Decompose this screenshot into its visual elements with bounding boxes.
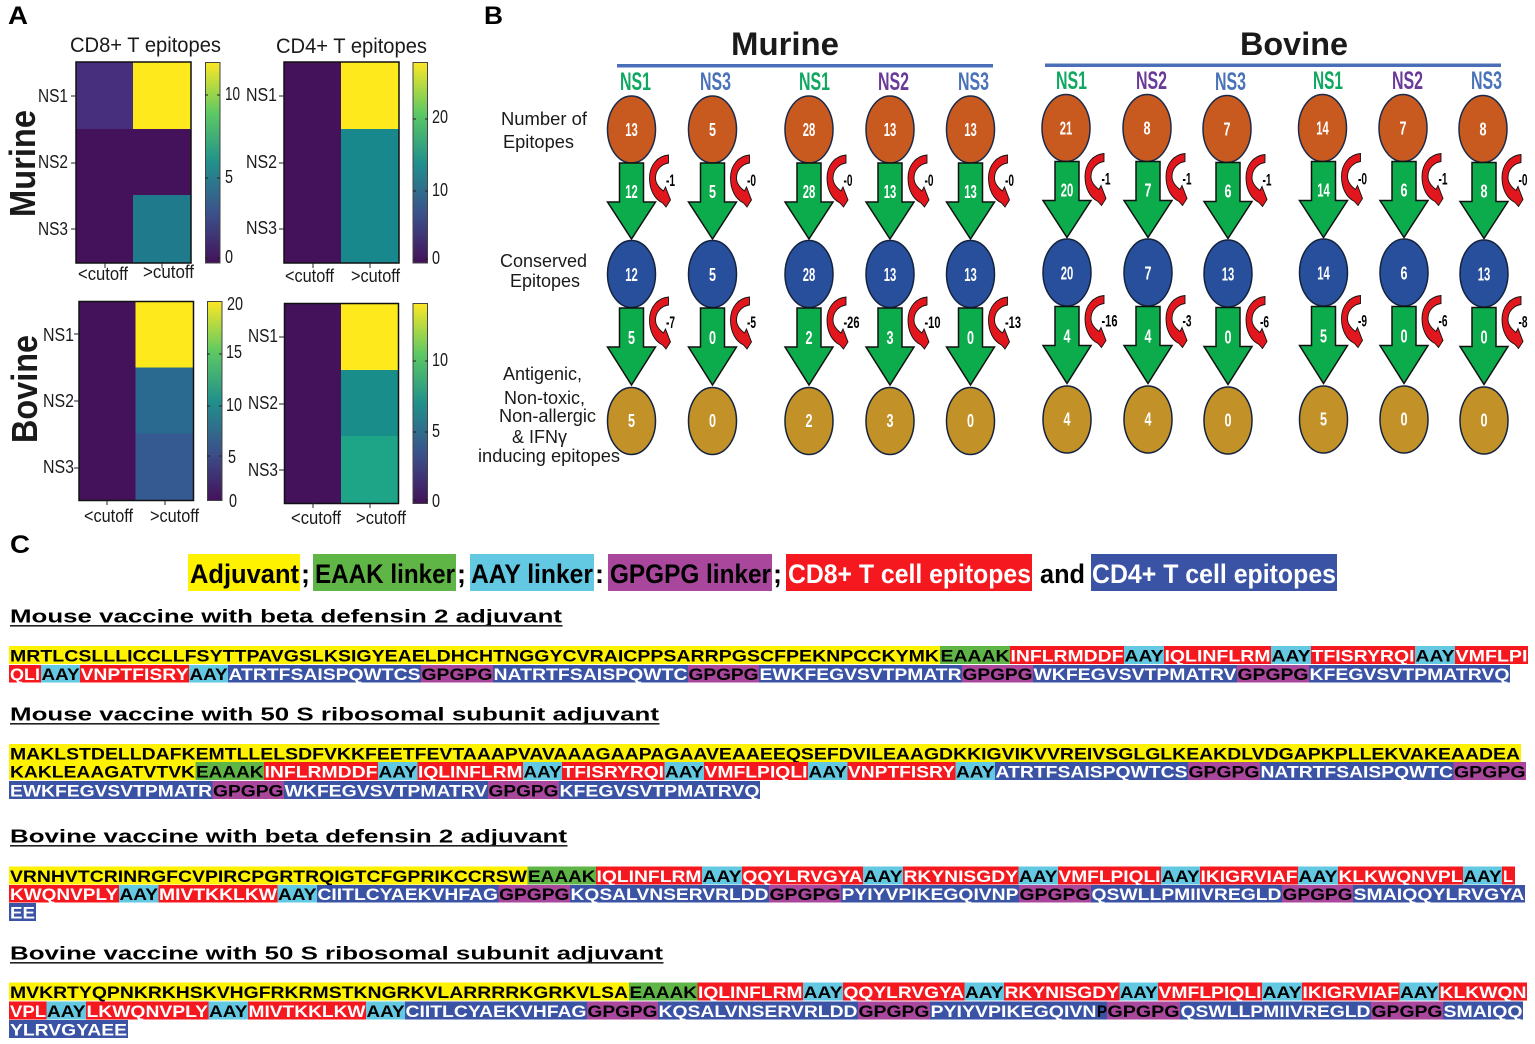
flow column: Bovine NS1 21 to 20 to 4 — [1042, 94, 1118, 453]
flow column: Murine NS3 13 to 13 to 0: -0 — [1005, 172, 1014, 190]
row label: Antigenic, non-toxic, non-allergic and IFN-gamma inducing epitopes: & IFNγ — [512, 427, 567, 447]
sequence: mouse beta defensin 2 vaccine: WKFEGVSVTPMATRV — [1034, 665, 1237, 684]
flow column: Bovine NS1 14 to 14 to 5: 14 — [1317, 264, 1330, 284]
heatmap: Bovine CD4: NS3 — [248, 460, 278, 480]
column header: Bovine NS1 second: NS1 — [1313, 67, 1343, 95]
flow column: Murine NS3 13 to 13 to 0: 0 — [967, 411, 974, 431]
heatmap: Bovine CD8: <cutoff — [84, 506, 134, 526]
sequence: bovine 50 S ribosomal vaccine: VPL — [10, 1002, 46, 1021]
panel C: colour legend: Adjuvant — [190, 559, 299, 589]
flow column: Bovine NS3 7 to 6 to 0: 0 — [1224, 328, 1232, 348]
flow column: Murine NS2 13 to 13 to 3: -0 — [924, 172, 934, 190]
sequence: bovine beta defensin 2 vaccine: AAY — [864, 867, 903, 886]
row label: Antigenic, non-toxic, non-allergic and IFN-gamma inducing epitopes: Non-allergic — [499, 406, 596, 426]
flow column: Bovine NS2 7 to 6 to 0: 6 — [1400, 264, 1408, 284]
flow column: Murine NS2 13 to 13 to 3: 13 — [884, 265, 896, 285]
sequence: mouse beta defensin 2 vaccine: GPGPG — [422, 665, 492, 684]
flow column: Murine NS1 13 to 12 to 5: 5 — [628, 411, 635, 431]
heatmap: Murine CD4: NS1 — [246, 85, 277, 105]
heatmap: Bovine CD8 — [43, 302, 200, 526]
flow column: Murine NS1 13 to 12 to 5: 12 — [625, 265, 638, 285]
heatmap: Murine CD8: NS1 — [38, 86, 68, 106]
heatmap: Bovine CD4: NS1 — [248, 326, 278, 346]
panel C: colour legend: ; — [301, 559, 310, 589]
Murine group rule — [617, 64, 993, 68]
flow column: Murine NS3 5 to 5 to 0: -5 — [747, 314, 756, 332]
sequence: mouse beta defensin 2 vaccine: GPGPG — [688, 665, 758, 684]
sequence: mouse 50 S ribosomal vaccine: GPGPG — [213, 782, 284, 800]
sequence: mouse beta defensin 2 vaccine: AAY — [1272, 646, 1311, 666]
sequence: mouse beta defensin 2 vaccine: AAY — [42, 665, 80, 684]
flow column: Murine NS1 13 to 12 to 5: -7 — [666, 314, 675, 332]
sequence: bovine beta defensin 2 vaccine: CIITLCYAEKVHFAG — [318, 885, 498, 904]
column header: Murine NS1 second: NS1 — [799, 68, 830, 96]
flow column: Bovine NS2 8 to 7 to 4: 4 — [1144, 326, 1152, 346]
sequence: bovine 50 S ribosomal vaccine: IKIGRVIAF — [1302, 983, 1399, 1002]
sequence: mouse beta defensin 2 vaccine: MRTLCSLLLICCLLFSYTTPAVGSLKSIGYEAELDHCHTNGGYCVRAICPPSARRPGSCFPEKNPCCKYMK — [10, 646, 940, 666]
column header: Murine NS3: NS3 — [700, 68, 731, 96]
flow column: Murine NS1 28 to 28 to 2: 2 — [806, 411, 812, 431]
colorbar: Murine CD8: 0 — [225, 247, 233, 267]
flow column: Bovine NS1 21 to 20 to 4: 20 — [1061, 264, 1073, 284]
flow column: Bovine NS2 7 to 6 to 0: 0 — [1400, 326, 1408, 346]
sequence: mouse 50 S ribosomal vaccine: VMFLPIQLI — [704, 762, 808, 782]
sequence: bovine 50 S ribosomal vaccine: AAY — [366, 1002, 405, 1021]
sequence: bovine 50 S ribosomal vaccine: MVKRTYQPNKRKHSKVHGFRKRMSTKNGRKVLARRRRKGRKVLSA — [10, 983, 628, 1002]
flow column: Bovine NS1 21 to 20 to 4: 4 — [1064, 410, 1070, 430]
flow column: Bovine NS1 21 to 20 to 4: -16 — [1102, 312, 1118, 330]
row label: Antigenic, non-toxic, non-allergic and IFN-gamma inducing epitopes: Non-toxic, — [504, 388, 585, 408]
sequence: bovine 50 S ribosomal vaccine: GPGPG — [1108, 1002, 1180, 1021]
flow column: Murine NS1 13 to 12 to 5: -1 — [666, 172, 675, 190]
flow column: Murine NS1 13 to 12 to 5: 5 — [628, 328, 635, 348]
panel C: colour legend: : — [595, 559, 604, 589]
column header: Bovine NS3 second: NS3 — [1471, 67, 1502, 95]
sequence: mouse 50 S ribosomal vaccine: ATRTFSAISPQWTCS — [996, 762, 1188, 782]
flow column: Murine NS3 13 to 13 to 0: 0 — [967, 328, 974, 348]
sequence: bovine 50 S ribosomal vaccine: SMAIQQ — [1444, 1002, 1522, 1021]
heatmap: Murine CD8: >cutoff — [143, 262, 195, 282]
sequence: mouse 50 S ribosomal vaccine: AAY — [956, 762, 995, 782]
sequence: mouse 50 S ribosomal vaccine: VNPTFISRY — [848, 762, 956, 782]
panel C: colour legend — [188, 554, 1337, 591]
flow column: Murine NS3 5 to 5 to 0: 0 — [709, 328, 716, 348]
colorbar: Bovine CD8: 10 — [226, 395, 242, 415]
sequence: mouse 50 S ribosomal vaccine: EWKFEGVSVTPMATR — [10, 782, 212, 800]
sequence: mouse beta defensin 2 vaccine: VMFLPI — [1456, 646, 1528, 666]
sequence: bovine beta defensin 2 vaccine: SMAIQQYLRVGYA — [1354, 885, 1524, 904]
flow column: Bovine NS1 21 to 20 to 4: 20 — [1061, 180, 1073, 200]
flow column: Murine NS2 13 to 13 to 3 — [866, 96, 940, 454]
heatmap: Murine CD4: <cutoff — [285, 266, 335, 286]
heading: CD8+ T epitopes: CD8+ T epitopes — [70, 34, 221, 57]
sequence: bovine beta defensin 2 vaccine: VMFLPIQLI — [1058, 867, 1160, 886]
row label: Number of Epitopes: Number of — [501, 109, 588, 129]
panel label C: C — [10, 531, 30, 559]
sequence: bovine 50 S ribosomal vaccine: QQYLRVGYA — [844, 983, 964, 1002]
sequence: bovine 50 S ribosomal vaccine: KQSALVNSERVRLDD — [658, 1002, 858, 1021]
sequence: bovine beta defensin 2 vaccine: GPGPG — [499, 885, 570, 904]
sequence: bovine beta defensin 2 vaccine: AAY — [1162, 867, 1200, 886]
column header: Bovine NS2: NS2 — [1136, 67, 1167, 95]
flow column: Bovine NS2 8 to 7 to 4: 4 — [1144, 410, 1152, 430]
sequence: mouse beta defensin 2 vaccine — [9, 646, 1528, 684]
flow column: Bovine NS3 8 to 8 to 0: 0 — [1480, 328, 1488, 348]
colorbar: Bovine CD8 — [207, 294, 243, 511]
sequence: mouse 50 S ribosomal vaccine: KAKLEAAGATVTVK — [10, 762, 196, 782]
flow column: Murine NS1 13 to 12 to 5: 12 — [625, 182, 638, 202]
flow column: Bovine NS2 8 to 7 to 4: 7 — [1144, 264, 1152, 284]
flow column: Murine NS1 28 to 28 to 2: 28 — [803, 120, 815, 140]
heatmap: Murine CD4: NS3 — [246, 218, 277, 238]
sequence: bovine 50 S ribosomal vaccine: GPGPG — [858, 1002, 930, 1021]
flow column: Bovine NS1 14 to 14 to 5: -0 — [1358, 170, 1367, 188]
flow column: Bovine NS2 8 to 7 to 4: 8 — [1144, 118, 1150, 138]
colorbar: Bovine CD8: 15 — [226, 342, 242, 362]
sequence: mouse beta defensin 2 vaccine: AAY — [1416, 646, 1455, 666]
flow column: Bovine NS2 8 to 7 to 4: 7 — [1144, 180, 1152, 200]
flow column: Murine NS2 13 to 13 to 3: 13 — [884, 182, 896, 202]
sequence: mouse 50 S ribosomal vaccine: KFEGVSVTPMATRVQ — [560, 782, 760, 800]
sequence: bovine 50 S ribosomal vaccine: GPGPG — [1372, 1002, 1442, 1021]
flow column: Bovine NS2 8 to 7 to 4 — [1123, 94, 1192, 453]
sequence: mouse 50 S ribosomal vaccine: NATRTFSAISPQWTC — [1260, 762, 1453, 782]
panel C: colour legend: and — [1040, 559, 1085, 589]
heatmap: Bovine CD4: NS2 — [248, 393, 278, 413]
flow column: Murine NS2 13 to 13 to 3: -10 — [924, 314, 940, 332]
sequence: mouse 50 S ribosomal vaccine: AAY — [524, 762, 562, 782]
flow column: Murine NS3 13 to 13 to 0: -13 — [1005, 314, 1021, 332]
colorbar: Bovine CD8: 0 — [229, 491, 237, 511]
sequence: mouse beta defensin 2 vaccine: AAY — [190, 665, 228, 684]
sequence: bovine 50 S ribosomal vaccine: AAY — [804, 983, 843, 1002]
flow column: Murine NS3 13 to 13 to 0: 13 — [964, 265, 977, 285]
colorbar: Murine CD8 — [205, 62, 240, 267]
colorbar: Murine CD8: 5 — [225, 167, 233, 187]
colorbar: Murine CD4 — [413, 62, 448, 268]
sequence: mouse beta defensin 2 vaccine: VNPTFISRY — [80, 665, 189, 684]
flow column: Bovine NS1 14 to 14 to 5: -9 — [1358, 312, 1367, 330]
sequence: bovine beta defensin 2 vaccine: AAY — [1464, 867, 1502, 886]
row label: Antigenic, non-toxic, non-allergic and IFN-gamma inducing epitopes: Antigenic, — [503, 364, 582, 384]
side label: Bovine: Bovine — [4, 335, 45, 443]
sequence: bovine beta defensin 2 vaccine: MIVTKKLKW — [159, 885, 278, 904]
sequence: bovine beta defensin 2 vaccine: AAY — [120, 885, 159, 904]
sequence: bovine 50 S ribosomal vaccine: EAAAK — [630, 983, 698, 1002]
flow column: Bovine NS3 8 to 8 to 0: 13 — [1478, 264, 1490, 284]
row label: Antigenic, non-toxic, non-allergic and IFN-gamma inducing epitopes: inducing epitopes — [478, 446, 620, 466]
flow column: Murine NS2 13 to 13 to 3: 3 — [886, 328, 894, 348]
heading: Bovine: Bovine — [1240, 26, 1348, 62]
sequence: bovine beta defensin 2 vaccine: GPGPG — [1020, 885, 1090, 904]
sequence: bovine 50 S ribosomal vaccine: AAY — [47, 1002, 86, 1021]
panel C: colour legend: CD8+ T cell epitopes — [788, 559, 1031, 589]
sequence: bovine 50 S ribosomal vaccine: AAY — [1400, 983, 1439, 1002]
sequence: bovine beta defensin 2 vaccine — [9, 866, 1525, 922]
flow column: Bovine NS3 8 to 8 to 0: 0 — [1480, 410, 1488, 430]
sequence: bovine beta defensin 2 vaccine: KLKWQNVPL — [1338, 867, 1462, 886]
sequence: mouse beta defensin 2 vaccine: GPGPG — [962, 665, 1032, 684]
row label: Number of Epitopes — [501, 109, 588, 152]
flow column: Murine NS1 28 to 28 to 2: -0 — [844, 172, 852, 190]
flow column: Bovine NS3 7 to 6 to 0: 6 — [1224, 182, 1232, 202]
flow column: Murine NS1 28 to 28 to 2 — [785, 96, 860, 454]
flow column: Bovine NS2 7 to 6 to 0: 0 — [1400, 410, 1408, 430]
colorbar: Murine CD8: 10 — [225, 84, 240, 104]
flow column: Bovine NS3 7 to 6 to 0: -6 — [1260, 314, 1269, 332]
sequence: bovine beta defensin 2 vaccine: EE — [10, 904, 35, 922]
flow column: Bovine NS2 7 to 6 to 0: -1 — [1438, 170, 1448, 188]
flow column: Bovine NS1 14 to 14 to 5: 14 — [1317, 180, 1330, 200]
panel C: colour legend: GPGPG linker — [610, 559, 771, 589]
flow column: Murine NS2 13 to 13 to 3: 13 — [884, 120, 896, 140]
Bovine group rule — [1045, 64, 1501, 67]
heatmap: Bovine CD4 — [248, 304, 407, 528]
row label: Conserved Epitopes — [500, 251, 587, 291]
flow column: Bovine NS2 7 to 6 to 0: 6 — [1400, 180, 1408, 200]
sequence: bovine 50 S ribosomal vaccine: AAY — [1120, 983, 1158, 1002]
heatmap: Bovine CD8: NS2 — [43, 391, 74, 411]
heading: Bovine vaccine with beta defensin 2 adjuvant: Bovine vaccine with beta defensin 2 adjuvant — [10, 826, 567, 846]
flow column: Murine NS3 5 to 5 to 0: 0 — [709, 411, 716, 431]
sequence: bovine 50 S ribosomal vaccine: QSWLLPMIIVREGLD — [1180, 1002, 1370, 1021]
flow column: Bovine NS1 14 to 14 to 5: 5 — [1320, 326, 1327, 346]
sequence: bovine beta defensin 2 vaccine: EAAAK — [528, 867, 596, 886]
sequence: bovine 50 S ribosomal vaccine: VMFLPIQLI — [1158, 983, 1262, 1002]
heading: Murine: Murine — [731, 26, 839, 62]
sequence: mouse beta defensin 2 vaccine: NATRTFSAISPQWTC — [494, 665, 688, 684]
flow column: Murine NS3 13 to 13 to 0: 13 — [964, 120, 977, 140]
flow column: Bovine NS1 21 to 20 to 4: 4 — [1064, 326, 1070, 346]
heatmap: Murine CD4: NS2 — [246, 152, 277, 172]
flow column: Murine NS3 5 to 5 to 0 — [688, 96, 756, 454]
row label: Number of Epitopes: Epitopes — [503, 132, 574, 152]
sequence: bovine beta defensin 2 vaccine: QQYLRVGYA — [742, 867, 862, 886]
sequence: bovine 50 S ribosomal vaccine: YLRVGYAEE — [10, 1020, 127, 1040]
flow column: Bovine NS1 21 to 20 to 4: 21 — [1060, 118, 1072, 138]
flow column: Bovine NS2 7 to 6 to 0: -6 — [1438, 312, 1448, 330]
sequence: mouse beta defensin 2 vaccine: INFLRMDDF — [1010, 646, 1124, 666]
panel C: colour legend: ; — [773, 559, 782, 589]
column header: Bovine NS1: NS1 — [1056, 67, 1087, 95]
sequence: bovine 50 S ribosomal vaccine: AAY — [965, 983, 1004, 1002]
sequence: mouse 50 S ribosomal vaccine: AAY — [665, 762, 704, 782]
sequence: mouse 50 S ribosomal vaccine: MAKLSTDELLDAFKEMTLLELSDFVKKFEETFEVTAAAPVAVAAAGAAPAGAAVEAAEEQSEFDVILEAAGDKKIGVIKVVREIVSGLGLKEAKDLVDGAPKPLLEKVAKEAADEA — [10, 744, 1520, 764]
heading: Mouse vaccine with beta defensin 2 adjuvant: Mouse vaccine with beta defensin 2 adjuvant — [10, 606, 562, 626]
colorbar: Bovine CD4: 0 — [432, 491, 440, 511]
flow column: Bovine NS1 21 to 20 to 4: -1 — [1102, 170, 1110, 188]
sequence: bovine beta defensin 2 vaccine: IQLINFLRM — [596, 867, 702, 886]
sequence: bovine 50 S ribosomal vaccine: LKWQNVPLY — [86, 1002, 209, 1021]
flow column: Murine NS3 5 to 5 to 0: 5 — [709, 265, 716, 285]
heatmap: Murine CD4 — [246, 62, 401, 286]
flow column: Bovine NS3 7 to 6 to 0 — [1203, 96, 1272, 454]
flow column: Murine NS3 5 to 5 to 0: -0 — [747, 172, 756, 190]
sequence: mouse 50 S ribosomal vaccine: AAY — [378, 762, 418, 782]
heatmap: Bovine CD8: NS1 — [43, 325, 74, 345]
sequence: bovine 50 S ribosomal vaccine: GPGPG — [588, 1002, 658, 1021]
sequence: mouse 50 S ribosomal vaccine: AAY — [808, 762, 848, 782]
sequence: mouse beta defensin 2 vaccine: GPGPG — [1238, 665, 1308, 684]
sequence: bovine beta defensin 2 vaccine: GPGPG — [1282, 885, 1352, 904]
sequence: bovine beta defensin 2 vaccine: IKIGRVIAF — [1200, 867, 1298, 886]
flow column: Murine NS1 28 to 28 to 2: -26 — [844, 314, 860, 332]
heatmap: Bovine CD4: <cutoff — [291, 508, 342, 528]
sequence: mouse 50 S ribosomal vaccine: INFLRMDDF — [264, 762, 378, 782]
sequence: mouse 50 S ribosomal vaccine: WKFEGVSVTPMATRV — [284, 782, 488, 800]
flow column: Bovine NS3 8 to 8 to 0: -0 — [1518, 172, 1528, 190]
flow column: Murine NS1 28 to 28 to 2: 28 — [803, 265, 815, 285]
heatmap: Murine CD8: <cutoff — [78, 264, 129, 284]
sequence: mouse beta defensin 2 vaccine: EAAAK — [940, 646, 1010, 666]
sequence: bovine beta defensin 2 vaccine: VRNHVTCRINRGFCVPIRCPGRTRQIGTCFGPRIKCCRSW — [10, 867, 528, 886]
panel C: colour legend: AAY linker — [471, 559, 593, 589]
flow column: Bovine NS3 7 to 6 to 0: 7 — [1224, 120, 1230, 140]
flow column: Murine NS1 28 to 28 to 2: 28 — [803, 182, 815, 202]
sequence: mouse beta defensin 2 vaccine: KFEGVSVTPMATRVQ — [1310, 665, 1510, 684]
colorbar: Murine CD4: 0 — [432, 248, 440, 268]
column header: Murine NS2: NS2 — [878, 68, 909, 96]
flow column: Murine NS1 13 to 12 to 5: 13 — [625, 120, 638, 140]
sequence: bovine beta defensin 2 vaccine: AAY — [1298, 867, 1338, 886]
heatmap: Murine CD8 — [38, 62, 195, 284]
sequence: bovine 50 S ribosomal vaccine: AAY — [1262, 983, 1302, 1002]
row label: Conserved Epitopes: Epitopes — [510, 271, 580, 291]
sequence: bovine 50 S ribosomal vaccine: P — [1097, 1002, 1107, 1021]
sequence: mouse 50 S ribosomal vaccine: GPGPG — [1454, 762, 1526, 782]
flow column: Bovine NS3 7 to 6 to 0: -1 — [1262, 172, 1272, 190]
flow column: Bovine NS3 8 to 8 to 0 — [1459, 96, 1528, 454]
side label: Murine: Murine — [2, 110, 43, 217]
heatmap: Bovine CD8: NS3 — [43, 457, 74, 477]
colorbar: Bovine CD8: 20 — [227, 294, 243, 314]
colorbar: Bovine CD8: 5 — [228, 447, 236, 467]
sequence: mouse beta defensin 2 vaccine: AAY — [1124, 646, 1164, 666]
flow column: Murine NS3 13 to 13 to 0: 13 — [964, 182, 977, 202]
row label: Antigenic, non-toxic, non-allergic and IFN-gamma inducing epitopes — [478, 364, 620, 466]
heading: Mouse vaccine with 50 S ribosomal subunit adjuvant: Mouse vaccine with 50 S ribosomal subunit adjuvant — [10, 704, 659, 724]
row label: Conserved Epitopes: Conserved — [500, 251, 587, 271]
sequence: mouse beta defensin 2 vaccine: QLI — [10, 665, 40, 684]
flow column: Bovine NS3 8 to 8 to 0: 8 — [1480, 120, 1486, 140]
sequence: bovine beta defensin 2 vaccine: KQSALVNSERVRLDD — [570, 885, 768, 904]
flow column: Bovine NS3 8 to 8 to 0: 8 — [1480, 182, 1488, 202]
heatmap: Murine CD8: NS2 — [38, 152, 68, 172]
flow column: Bovine NS1 14 to 14 to 5 — [1298, 94, 1367, 453]
panel label A: A — [8, 2, 28, 30]
sequence: bovine 50 S ribosomal vaccine: AAY — [209, 1002, 248, 1021]
heatmap: Murine CD8: NS3 — [38, 219, 68, 239]
sequence: bovine 50 S ribosomal vaccine — [9, 982, 1527, 1040]
flow column: Murine NS1 13 to 12 to 5 — [608, 96, 675, 454]
sequence: mouse 50 S ribosomal vaccine: EAAAK — [196, 762, 264, 782]
sequence: mouse 50 S ribosomal vaccine: GPGPG — [1188, 762, 1260, 782]
panel C: colour legend: EAAK linker — [315, 559, 455, 589]
sequence: mouse 50 S ribosomal vaccine: IQLINFLRM — [418, 762, 522, 782]
sequence: bovine beta defensin 2 vaccine: AAY — [702, 867, 742, 886]
sequence: bovine beta defensin 2 vaccine: L — [1503, 867, 1513, 886]
flow column: Murine NS3 5 to 5 to 0: 5 — [709, 182, 716, 202]
column header: Bovine NS3: NS3 — [1215, 68, 1246, 96]
sequence: bovine beta defensin 2 vaccine: AAY — [1019, 867, 1058, 886]
flow column: Bovine NS3 7 to 6 to 0: 0 — [1224, 410, 1232, 430]
column header: Bovine NS2 second: NS2 — [1392, 67, 1423, 95]
heading: Bovine vaccine with 50 S ribosomal subunit adjuvant: Bovine vaccine with 50 S ribosomal subunit adjuvant — [10, 944, 663, 964]
flow column: Bovine NS2 8 to 7 to 4: -1 — [1182, 170, 1192, 188]
colorbar: Bovine CD4: 5 — [432, 421, 440, 441]
sequence: mouse beta defensin 2 vaccine: EWKFEGVSVTPMATR — [760, 665, 962, 684]
sequence: mouse 50 S ribosomal vaccine: GPGPG — [488, 782, 558, 800]
sequence: bovine beta defensin 2 vaccine: QSWLLPMIIVREGLD — [1092, 885, 1282, 904]
sequence: bovine beta defensin 2 vaccine: AAY — [278, 885, 317, 904]
sequence: mouse 50 S ribosomal vaccine: TFISRYRQI — [562, 762, 664, 782]
panel A: heatmaps — [2, 34, 448, 528]
heatmap: Murine CD4: >cutoff — [351, 266, 401, 286]
panel C: colour legend: CD4+ T cell epitopes — [1092, 559, 1336, 589]
column header: Murine NS3 second: NS3 — [958, 68, 989, 96]
colorbar: Bovine CD4 — [413, 304, 448, 511]
flow column: Bovine NS2 8 to 7 to 4: -3 — [1182, 312, 1192, 330]
flow column: Murine NS1 28 to 28 to 2: 2 — [806, 328, 812, 348]
flow column: Bovine NS2 7 to 6 to 0: 7 — [1400, 118, 1406, 138]
sequence: bovine beta defensin 2 vaccine: KWQNVPLY — [10, 885, 119, 904]
flow column: Bovine NS2 7 to 6 to 0 — [1379, 94, 1448, 453]
colorbar: Bovine CD4: 10 — [432, 350, 448, 370]
heatmap: Bovine CD8: >cutoff — [150, 506, 200, 526]
panel B: epitope filtering flow — [478, 26, 1528, 466]
sequence: bovine 50 S ribosomal vaccine: MIVTKKLKW — [248, 1002, 367, 1021]
sequence: bovine beta defensin 2 vaccine: RKYNISGDY — [904, 867, 1019, 886]
panel C: colour legend: ; — [457, 559, 466, 589]
sequence: bovine 50 S ribosomal vaccine: IQLINFLRM — [698, 983, 802, 1002]
sequence: mouse beta defensin 2 vaccine: TFISRYRQI — [1312, 646, 1414, 666]
flow column: Murine NS3 5 to 5 to 0: 5 — [709, 120, 716, 140]
colorbar: Murine CD4: 10 — [432, 180, 448, 200]
heading: CD4+ T epitopes: CD4+ T epitopes — [276, 35, 427, 58]
flow column: Bovine NS3 7 to 6 to 0: 13 — [1222, 264, 1234, 284]
sequence: mouse 50 S ribosomal vaccine — [9, 744, 1526, 800]
sequence: bovine 50 S ribosomal vaccine: PYIYVPIKEGQIVN — [930, 1002, 1096, 1021]
sequence: mouse beta defensin 2 vaccine: ATRTFSAISPQWTCS — [228, 665, 420, 684]
sequence: bovine 50 S ribosomal vaccine: CIITLCYAEKVHFAG — [406, 1002, 586, 1021]
column header: Murine NS1: NS1 — [620, 68, 651, 96]
heatmap: Bovine CD4: >cutoff — [356, 508, 407, 528]
sequence: bovine beta defensin 2 vaccine: GPGPG — [770, 885, 840, 904]
flow column: Murine NS3 13 to 13 to 0 — [946, 96, 1021, 454]
colorbar: Murine CD4: 20 — [432, 107, 448, 127]
flow column: Bovine NS1 14 to 14 to 5: 14 — [1316, 118, 1329, 138]
sequence: bovine 50 S ribosomal vaccine: KLKWQN — [1440, 983, 1526, 1002]
sequence: bovine 50 S ribosomal vaccine: RKYNISGDY — [1004, 983, 1120, 1002]
sequence: bovine beta defensin 2 vaccine: PYIYVPIKEGQIVNP — [842, 885, 1018, 904]
flow column: Bovine NS1 14 to 14 to 5: 5 — [1320, 410, 1327, 430]
flow column: Bovine NS3 8 to 8 to 0: -8 — [1518, 314, 1528, 332]
sequence: mouse beta defensin 2 vaccine: IQLINFLRM — [1164, 646, 1270, 666]
flow column: Murine NS2 13 to 13 to 3: 3 — [886, 411, 894, 431]
panel label B: B — [484, 2, 503, 30]
